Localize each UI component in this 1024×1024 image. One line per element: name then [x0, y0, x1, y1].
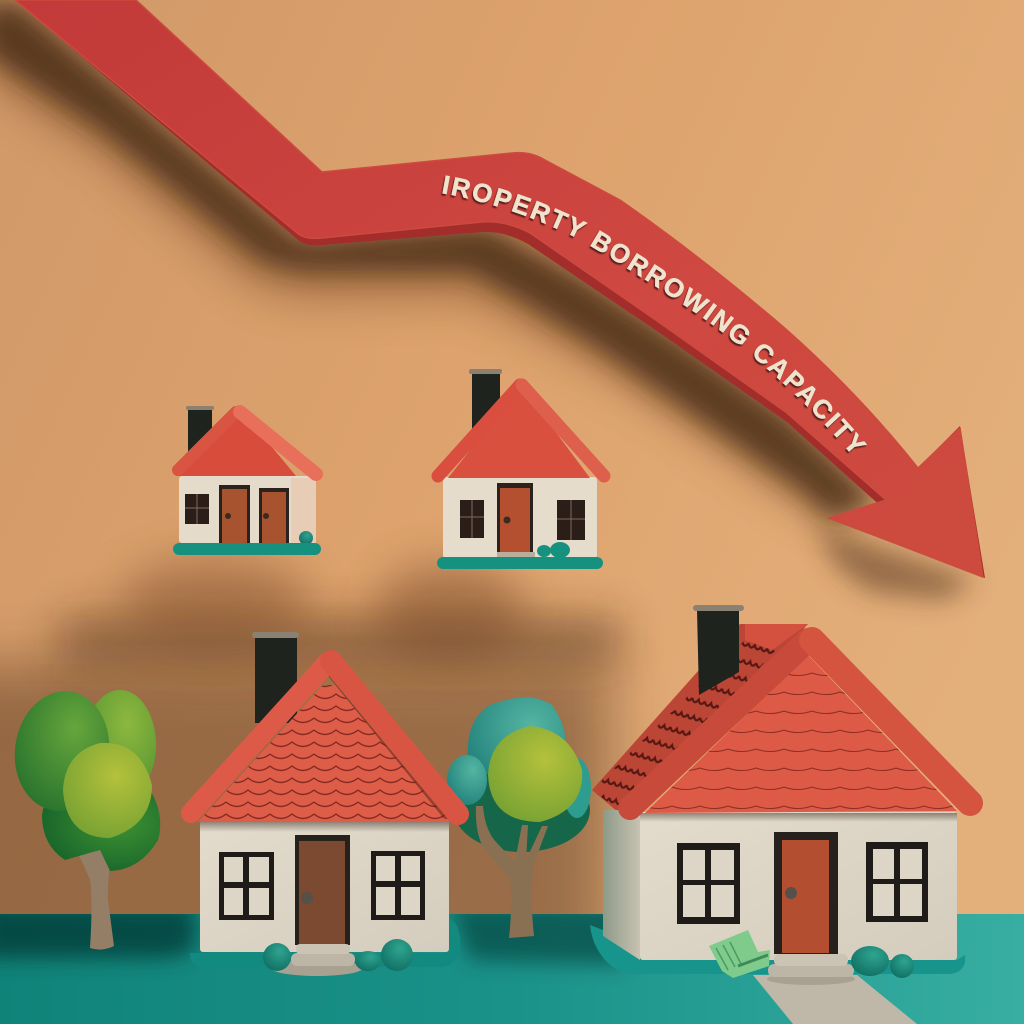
bush [299, 531, 313, 545]
door [497, 483, 535, 558]
bushes [851, 946, 914, 978]
chimney [693, 605, 744, 695]
windows [219, 851, 425, 920]
roof gable [630, 640, 970, 813]
chimney [252, 632, 299, 723]
roof [438, 385, 604, 478]
steps [767, 954, 855, 985]
large house right [590, 605, 970, 1024]
arrow label: IROPERTY BORROWING CAPACITY [440, 175, 868, 454]
walls [200, 820, 449, 952]
chimney [469, 369, 502, 432]
trunk [476, 806, 548, 938]
base [190, 918, 460, 967]
small house right [437, 369, 604, 569]
chimney [186, 406, 214, 457]
base [590, 925, 965, 974]
base [173, 543, 321, 555]
front wall [640, 812, 957, 960]
windows [677, 842, 928, 924]
money stack [709, 930, 770, 978]
trunk [62, 818, 114, 950]
roof [191, 661, 458, 822]
path to door [753, 975, 917, 1024]
small house left [173, 406, 321, 555]
bushes [537, 542, 570, 558]
bushes [263, 939, 413, 971]
walls [443, 477, 597, 558]
foliage [7, 685, 160, 871]
base [437, 557, 603, 569]
doors [219, 485, 289, 543]
roof [176, 412, 316, 476]
window [185, 494, 209, 524]
large house left [190, 632, 460, 976]
door [295, 835, 350, 945]
back roof slope [592, 624, 808, 818]
side wall [603, 810, 640, 960]
steps [271, 944, 363, 976]
foliage front [488, 726, 582, 822]
tree right [447, 698, 591, 938]
tree left [7, 685, 160, 950]
walls [179, 476, 316, 543]
foliage back [447, 698, 591, 852]
door [774, 832, 838, 954]
ground [0, 905, 1024, 1024]
windows [460, 500, 585, 540]
